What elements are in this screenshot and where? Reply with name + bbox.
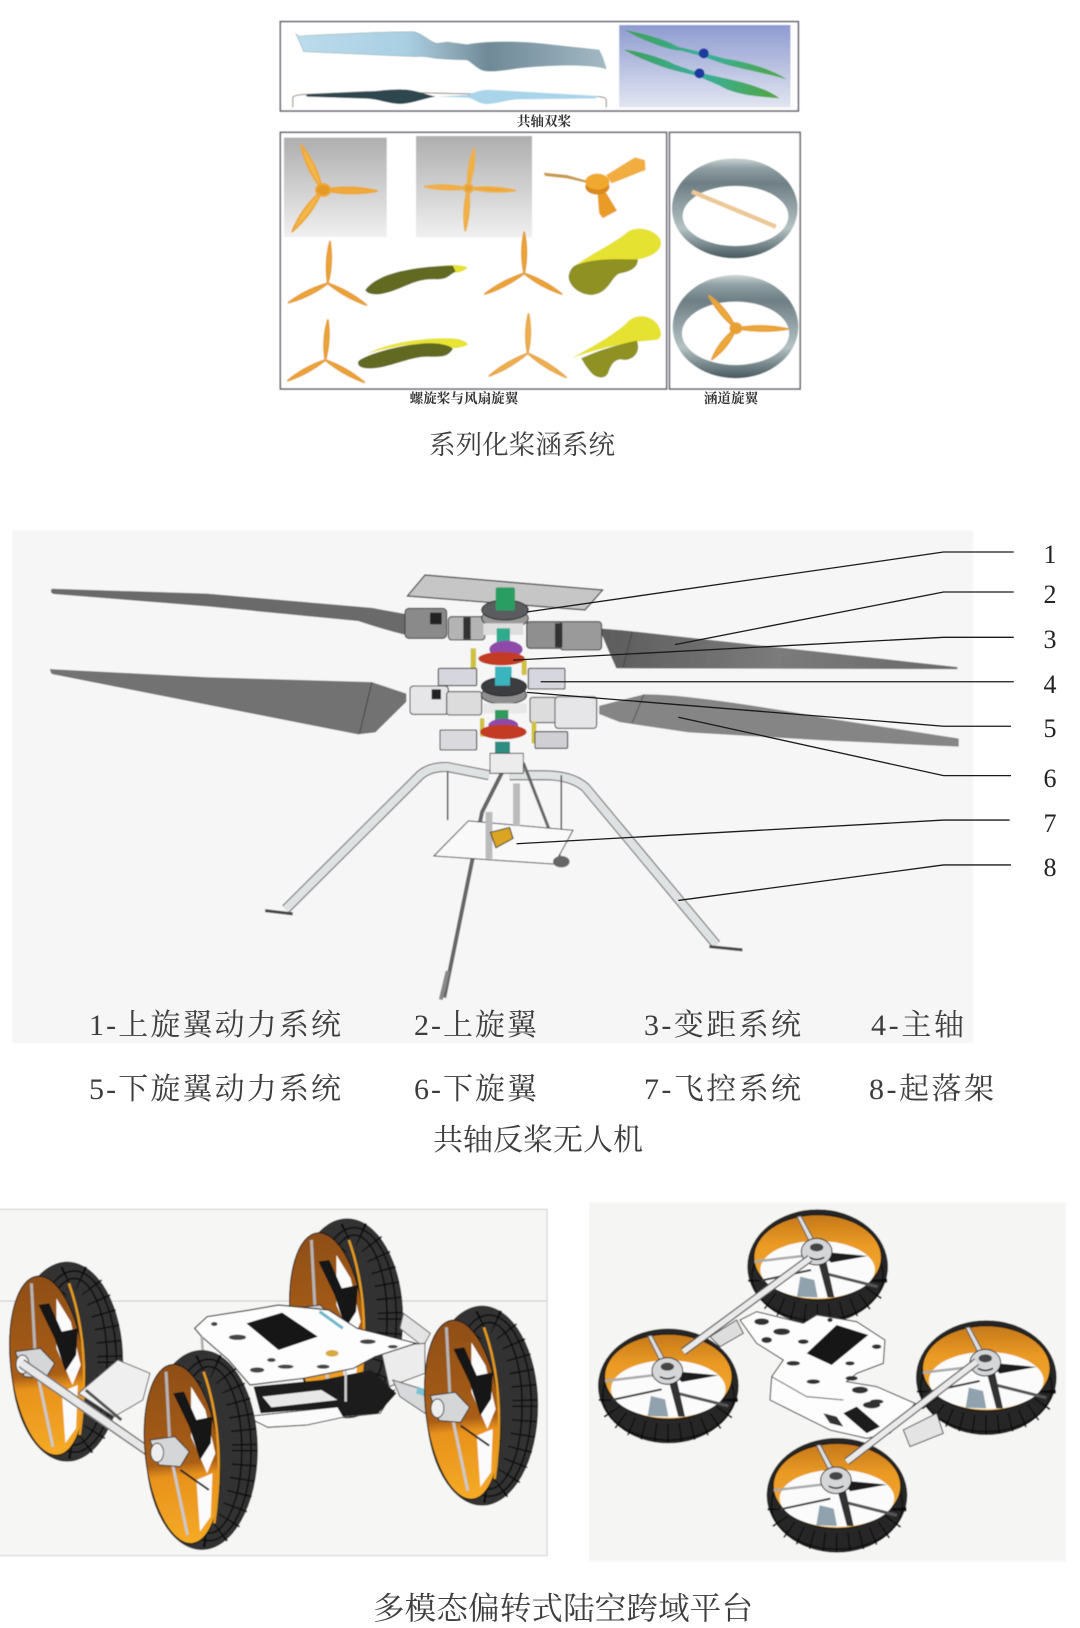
legend of parts: 1-上旋翼动力系统: [89, 1009, 341, 1042]
legend of parts: 6-下旋翼: [414, 1073, 538, 1106]
caption: propeller and fan rotors: 螺旋桨与风扇旋翼: [410, 390, 520, 406]
panel: diagram background: [12, 530, 973, 1043]
wheel: top: [747, 1209, 888, 1324]
leader lines: [513, 552, 1014, 900]
heading: series propeller-duct system: 系列化桨涵系统: [429, 430, 616, 460]
icon: fan blade 1: [365, 265, 468, 294]
chassis: structure right and left: [79, 1313, 430, 1417]
panel: coaxial twin propellers: [280, 22, 798, 111]
legend of parts: 3-变距系统: [644, 1009, 801, 1042]
panel: propeller and fan rotors: [280, 132, 667, 389]
callout numbers: 8: [1044, 853, 1056, 882]
callout numbers: 5: [1044, 714, 1056, 743]
section: multimodal land-air platform: [0, 1203, 1066, 1626]
legend of parts: 4-主轴: [871, 1009, 964, 1042]
wheel: front right: [416, 1306, 538, 1506]
caption: ducted rotors: 涵道旋翼: [704, 390, 760, 406]
panel: flight mode render: [589, 1203, 1066, 1562]
callout numbers: 6: [1044, 764, 1056, 793]
heading: coaxial counter-rotating UAV: 共轴反桨无人机: [433, 1124, 643, 1157]
wheel: right: [916, 1320, 1057, 1435]
section: propeller and duct series: [280, 22, 800, 460]
icon: propeller row 2 right: [485, 232, 562, 294]
upper rotor power system: [405, 587, 602, 650]
icon: fan blade 3: [358, 338, 468, 369]
landing gear: [265, 763, 742, 1000]
legend of parts: 2-上旋翼: [414, 1009, 538, 1042]
icon: propeller row 3 right: [489, 314, 566, 377]
upper rotor blades: [51, 589, 957, 669]
icon: duct with three-blade rotor: [673, 275, 798, 378]
chassis: lower body: [246, 1350, 396, 1427]
icon: propeller row 3 left: [288, 320, 364, 382]
heading: multimodal tilting land-air cross-domain platform: 多模态偏转式陆空跨域平台: [373, 1591, 753, 1626]
callout numbers: 4: [1044, 670, 1056, 699]
wheel: bottom: [767, 1438, 907, 1553]
flight control system plate: [434, 783, 573, 867]
callout numbers: 2: [1044, 580, 1056, 609]
caption: coaxial twin propellers: 共轴双桨: [517, 113, 572, 129]
lower rotor power system: [410, 675, 597, 728]
legend of parts: 7-飞控系统: [644, 1073, 801, 1106]
icon: propeller row 2 left: [289, 242, 366, 305]
legend of parts: 8-起落架: [869, 1073, 994, 1106]
wheel: left: [598, 1329, 739, 1443]
chassis: upper plate: [195, 1305, 416, 1385]
callout numbers: 3: [1044, 625, 1056, 654]
chassis: central plates: [740, 1312, 915, 1438]
callout numbers: [1044, 540, 1056, 882]
wheel: rear left: [1, 1262, 123, 1462]
arms and motor mounts: [21, 1363, 464, 1455]
legend of parts: 5-下旋翼动力系统: [89, 1073, 341, 1106]
lower rotor blades: [50, 669, 959, 747]
lower swashplate and servos: [440, 710, 568, 773]
legend of parts: [89, 1009, 994, 1106]
panel: ducted rotors: [669, 132, 800, 389]
icon: four-blade propeller: [425, 148, 515, 231]
section: coaxial counter-rotating UAV diagram: [12, 530, 1056, 1157]
wheel: rear right: [281, 1218, 403, 1418]
upper swashplate and pitch links: [438, 641, 565, 689]
callout numbers: 1: [1044, 540, 1056, 569]
icon: duct with two-blade rotor: [672, 158, 798, 258]
icon: fan blade 4: [571, 316, 661, 378]
wheel: front left: [135, 1350, 258, 1550]
panel: simulation render of twin blades: [619, 25, 791, 107]
icon: fan blade 2: [569, 229, 661, 295]
icon: three-blade propeller: [292, 145, 377, 232]
icon: 3D wide propeller: [544, 157, 646, 218]
arms: [683, 1258, 977, 1462]
coaxial mast assembly: [405, 575, 603, 773]
icon: blue propeller top view: [296, 32, 606, 71]
callout numbers: 7: [1044, 809, 1056, 838]
icon: propeller side view: [293, 89, 606, 107]
panel: ground mode render: [0, 1209, 547, 1556]
